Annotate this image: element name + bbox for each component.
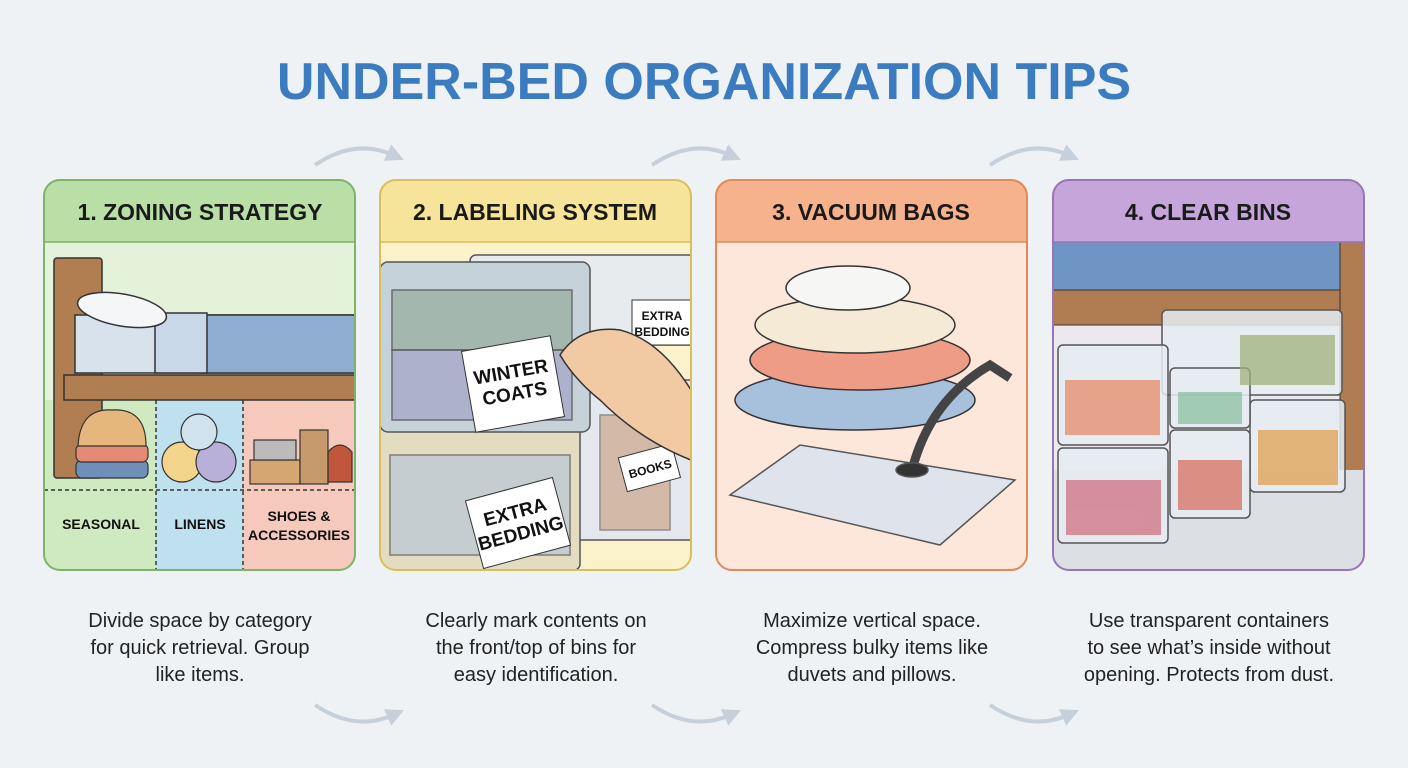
text: description 1 [88, 610, 312, 686]
text: description 3: Compress bulky items like [756, 637, 988, 659]
panel: clear bins [1053, 180, 1364, 570]
label: small tags: EXTRA [642, 309, 683, 323]
icon: hand [560, 329, 691, 460]
text: description 4 [1084, 610, 1334, 686]
label: extra bedding: EXTRA [481, 494, 549, 531]
heading: 3. VACUUM BAGS [772, 199, 970, 225]
arrows: bottom [315, 705, 1068, 722]
icon: rolled towels [162, 414, 236, 482]
text: description 3: duvets and pillows. [788, 664, 956, 686]
zone labels: SEASONAL [62, 516, 140, 532]
arrows: top [315, 148, 1068, 165]
label: winter coats: COATS [481, 378, 549, 410]
text: description 2: easy identification. [454, 664, 618, 686]
zone labels [62, 508, 350, 543]
text: description 4: opening. Protects from dust. [1084, 664, 1334, 686]
panel: labeling system [380, 180, 700, 570]
icon: pillow stack [735, 266, 975, 430]
text: description 1: like items. [156, 664, 244, 686]
text: description 2: Clearly mark contents on [425, 610, 647, 632]
label: small tags [618, 300, 692, 492]
title: UNDER-BED ORGANIZATION TIPS [277, 53, 1131, 111]
text: description 1: for quick retrieval. Group [91, 637, 309, 659]
icon: bed [54, 258, 355, 478]
label: extra bedding [465, 478, 571, 568]
label: extra bedding: BEDDING [476, 513, 566, 556]
zone labels: LINENS [174, 516, 226, 532]
heading: 4. CLEAR BINS [1125, 199, 1291, 225]
label: winter coats: WINTER [472, 356, 550, 390]
icon: sweaters [76, 410, 148, 478]
panel: vacuum bags [716, 180, 1027, 570]
icon: stacked bins [380, 255, 700, 570]
label: winter coats [462, 336, 564, 432]
icon: clear bins [1058, 310, 1345, 543]
text: description 1: Divide space by category [88, 610, 312, 632]
text: description 4: Use transparent containers [1089, 610, 1329, 632]
label: small tags: BOOKS [627, 457, 673, 481]
zone labels: ACCESSORIES [248, 527, 350, 543]
icon: vacuum bag [730, 365, 1015, 545]
label: small tags: BEDDING [634, 325, 690, 339]
text: description 3 [756, 610, 988, 686]
icon: shoes and bags [250, 430, 352, 484]
text: description 3: Maximize vertical space. [763, 610, 981, 632]
text: description 2: the front/top of bins for [436, 637, 636, 659]
panel: zoning strategy [44, 180, 355, 570]
text: description 2 [425, 610, 647, 686]
text: description 4: to see what’s inside without [1087, 637, 1331, 659]
zone labels: SHOES & [267, 508, 331, 524]
heading: 2. LABELING SYSTEM [413, 199, 657, 225]
heading: 1. ZONING STRATEGY [78, 199, 322, 225]
